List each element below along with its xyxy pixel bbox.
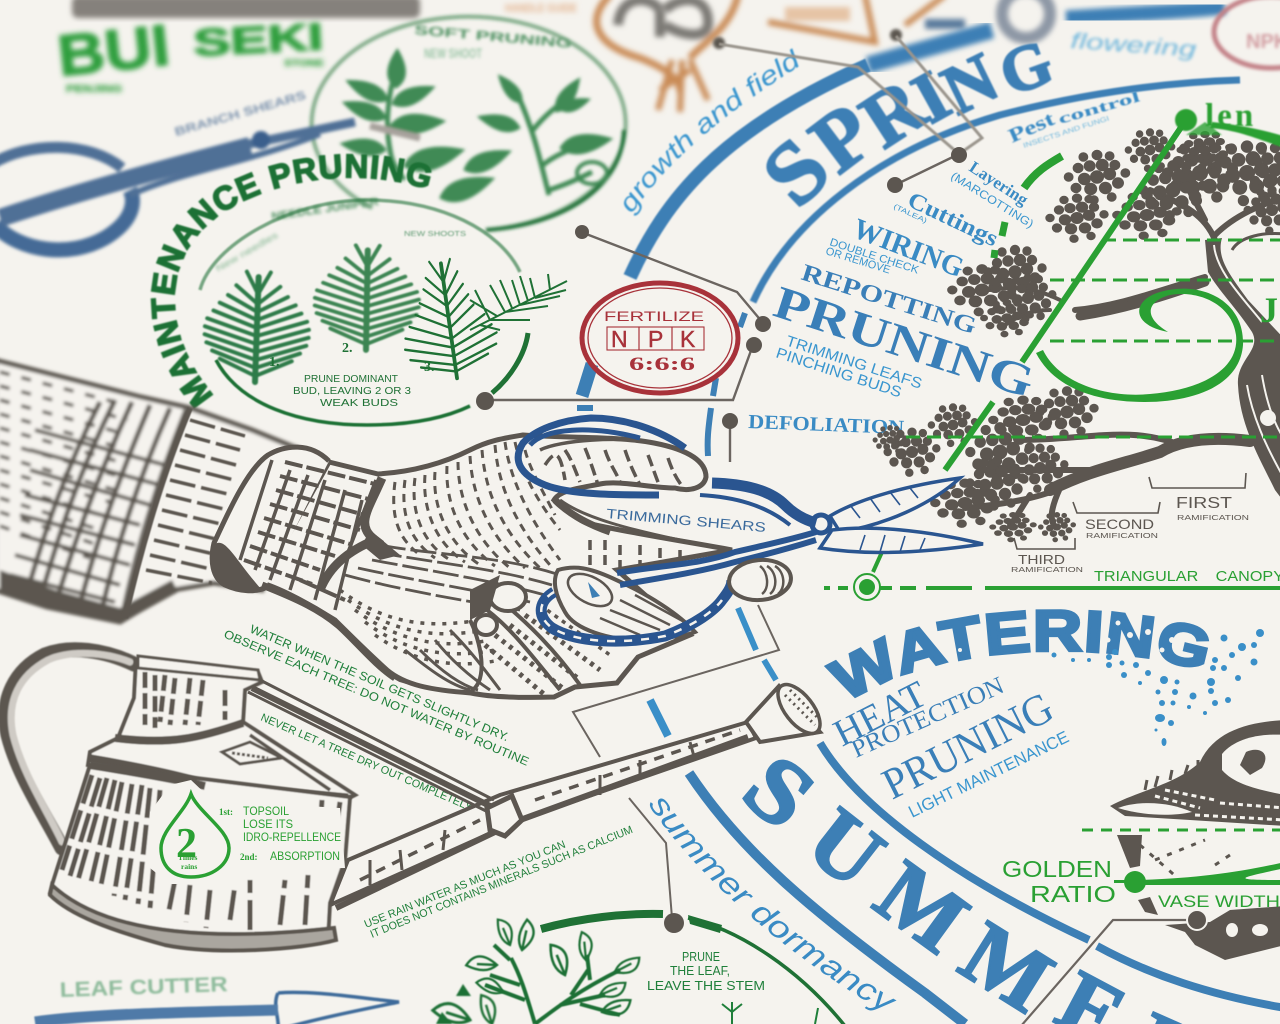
fern three with long branch <box>393 254 567 385</box>
handle bottom loop <box>617 532 816 573</box>
shears label: BRANCH SHEARS <box>173 88 308 139</box>
layering: Layering <box>966 157 1032 210</box>
can handle <box>6 650 134 848</box>
finger joints <box>475 583 526 635</box>
cuttings: Cuttings <box>904 187 1002 251</box>
first: FIRST <box>1176 495 1232 512</box>
dashed rim line <box>1082 828 1280 832</box>
outer arc below stamp <box>582 364 592 396</box>
heading: watering: WATERING <box>824 609 1210 698</box>
stamp: fertilize npk <box>582 283 738 393</box>
dashed height lines <box>906 240 1280 437</box>
pest control <box>1005 89 1142 150</box>
absorption notes: ABSORPTION <box>270 851 340 863</box>
pot dashes <box>1140 840 1230 880</box>
sleeve near part <box>125 408 245 618</box>
heading: spring: N <box>931 39 1010 130</box>
inner spring arc <box>753 80 1240 302</box>
golden ratio text: RATIO <box>1030 881 1116 907</box>
left plant leaves <box>433 984 495 1024</box>
pruning: PRUNING <box>768 276 1041 408</box>
blade lower <box>820 528 983 552</box>
short canopy arc <box>994 156 1062 258</box>
absorption notes: TOPSOIL <box>243 806 290 818</box>
can body <box>50 765 350 950</box>
circle heading: SOFT PRUNING <box>414 22 572 51</box>
third sub: RAMIFICATION <box>1011 565 1083 574</box>
foot holes <box>1226 923 1268 937</box>
defoliation: DEFOLIATION <box>748 411 905 439</box>
numerals: 1. <box>269 355 280 370</box>
can spout <box>248 678 828 908</box>
connector dots blurred top <box>713 29 902 49</box>
golden ratio dot <box>1114 871 1146 893</box>
subtitle under heading: NEEDLE JUNIPER <box>271 196 379 223</box>
pot left wall <box>1117 835 1142 868</box>
plant branches <box>485 945 620 1024</box>
left margin rule <box>62 20 68 1024</box>
plant leaves <box>466 918 641 1015</box>
knob <box>727 557 793 603</box>
panel: upper tree canopy <box>873 129 1280 542</box>
label: LEAF CUTTER <box>59 973 228 1002</box>
heading: spring: I <box>899 55 963 139</box>
first sub: RAMIFICATION <box>1177 513 1249 522</box>
heading: spring: R <box>845 60 941 164</box>
golden ratio text <box>1002 856 1116 907</box>
water drop badge <box>150 780 345 884</box>
absorption notes <box>219 806 341 863</box>
circle outline <box>312 17 626 230</box>
branches <box>965 165 1280 527</box>
tagline: flowering: flowering <box>1070 28 1198 62</box>
thumb <box>555 568 695 640</box>
pruning notes two: PINCHING BUDS <box>774 345 904 401</box>
panel: watering can <box>6 650 828 950</box>
golden ratio text: GOLDEN <box>1002 856 1112 882</box>
number: 2 <box>176 821 197 867</box>
leaf note: THE LEAF, <box>670 963 730 978</box>
stamp heading: FERTILIZE <box>604 308 704 324</box>
spout collar <box>487 796 522 836</box>
summer tasks <box>827 672 1072 822</box>
can label plate <box>222 742 282 764</box>
grey tool <box>618 0 708 37</box>
blue nail mark <box>588 582 600 598</box>
wiring note: DOUBLE CHECK <box>828 236 921 277</box>
title: bui seki: STONE <box>284 58 324 68</box>
spiral <box>1036 289 1243 402</box>
panel: branch shears blurred <box>0 88 355 250</box>
numerals: 2. <box>342 341 352 356</box>
tagline: summer dormancy: summer dormancy <box>650 798 896 1010</box>
heading: summer <box>725 734 1219 1024</box>
root ball highlight <box>1118 735 1280 815</box>
connector dot <box>664 913 684 933</box>
neck and shoulder <box>88 656 355 800</box>
panel: trunk <box>1205 234 1280 510</box>
vase connector <box>1021 920 1195 1024</box>
panel: golden spiral and triangle construction <box>824 98 1280 600</box>
sprig one <box>339 49 514 207</box>
right note: NEW SHOOTS <box>404 231 466 238</box>
heading len: len <box>1205 98 1256 134</box>
panel: vase and root <box>1002 720 1280 1024</box>
protection: PROTECTION <box>847 672 1008 763</box>
pruning note <box>293 374 411 409</box>
grey ring <box>1002 0 1050 38</box>
heading: spring: G <box>990 26 1061 109</box>
trunk mass <box>1205 238 1280 510</box>
rains: rains <box>181 862 197 871</box>
orange triangle tool <box>768 0 945 42</box>
circle arcs <box>200 200 528 425</box>
wiring note two: OR REMOVE <box>824 245 892 276</box>
heading: spring: S <box>743 119 848 225</box>
title: bui seki <box>55 13 324 95</box>
tagline: growth and field: growth and field <box>622 48 800 217</box>
continuing outer arc <box>650 700 668 736</box>
pruning note: BUD, LEAVING 2 OR 3 <box>293 386 411 397</box>
connector dots <box>476 147 967 429</box>
cuff ring <box>212 447 329 591</box>
npk boxes <box>607 327 704 350</box>
letter J: J <box>1260 290 1278 330</box>
heading: spring: P <box>794 86 891 191</box>
top grey tool bar <box>72 0 420 18</box>
thumb nail <box>563 567 690 635</box>
times rains: Times <box>178 853 198 862</box>
pest control: Pest <box>1005 108 1058 148</box>
numerals <box>269 341 434 375</box>
blade upper <box>830 478 960 532</box>
trunk strands <box>1214 245 1280 480</box>
panel: soft pruning circle <box>312 17 626 230</box>
heading: summer: U <box>790 789 902 907</box>
arc thick <box>541 914 663 929</box>
panel: leaf pruning circle <box>433 913 845 1024</box>
triangle side line <box>873 120 1186 572</box>
pruning: PRUNING <box>874 682 1061 809</box>
pruning note: PRUNE DOMINANT <box>304 374 398 385</box>
orange tool <box>597 0 738 92</box>
arc right <box>688 918 845 1024</box>
pest control: control <box>1057 89 1142 128</box>
fern one <box>203 270 311 384</box>
small note: NEW SHOOT <box>424 45 482 61</box>
small notes: New needles <box>214 230 280 274</box>
heading: summer: M <box>858 842 985 972</box>
fern two <box>314 245 420 351</box>
absorption notes: IDRO-REPELLENCE <box>243 832 341 844</box>
golden ratio lines <box>1140 862 1280 885</box>
note four: USE RAIN WATER AS MUCH AS YOU CAN <box>363 839 567 931</box>
knit wrist <box>240 460 395 678</box>
talea: (TALEA) <box>892 203 928 225</box>
panel: maintenance pruning circle <box>150 152 568 428</box>
upper finger lines <box>540 439 732 570</box>
foliage <box>1064 150 1130 204</box>
outer summer arc <box>689 773 965 1024</box>
blade hatch <box>850 488 925 552</box>
rose head <box>746 686 820 742</box>
npk letters: N <box>611 326 628 352</box>
npk letters: P <box>648 326 663 352</box>
panel: sleeve <box>0 360 296 624</box>
inner summer arc <box>820 743 1089 940</box>
heading: spring <box>743 26 1061 225</box>
stamp: top right red blurred <box>1214 0 1280 68</box>
shadow joining finger and palm <box>362 530 500 620</box>
panel: spring arcs <box>577 7 1240 456</box>
connector dot <box>1187 910 1207 930</box>
title: bui seki: SEKI <box>192 16 324 65</box>
spring tasks <box>748 89 1142 439</box>
white stitching <box>541 592 722 641</box>
pivot <box>812 515 830 533</box>
numerals: 3. <box>424 360 434 375</box>
absorption notes: 2nd: <box>240 852 258 862</box>
npk letters: K <box>680 326 696 352</box>
white window in trunk <box>1232 235 1280 300</box>
panel: summer arcs <box>689 743 1280 1024</box>
continuing blue arc segments <box>738 608 776 680</box>
grey blade tip <box>370 126 420 138</box>
first ramification bracket <box>1014 473 1246 549</box>
small sprig <box>722 1002 818 1024</box>
outer spring arc <box>630 65 868 277</box>
note two: OBSERVE EACH TREE: DO NOT WATER BY ROUTINE <box>222 627 531 769</box>
note five: IT DOES NOT CONTAINS MINERALS SUCH AS CALCIUM <box>369 824 635 941</box>
leaf note <box>647 949 765 993</box>
connector lines spring <box>485 36 982 462</box>
sleeve far part <box>0 360 296 624</box>
ratio: 6:6:6 <box>629 354 695 375</box>
panel: trimming shears <box>518 418 983 736</box>
title: bui seki: BUI <box>55 13 173 89</box>
sprig two <box>476 71 614 195</box>
apex dot <box>1175 109 1280 150</box>
second: SECOND <box>1085 516 1154 532</box>
rim dots <box>1155 790 1280 820</box>
pest control: INSECTS AND FUNGI <box>1022 115 1110 150</box>
hand silhouette <box>262 435 732 697</box>
cutter outline <box>276 992 399 1024</box>
pruning notes: TRIMMING LEAFS <box>784 333 924 393</box>
note three: NEVER LET A TREE DRY OUT COMPLETELY! <box>259 712 476 815</box>
palm hatching <box>394 442 560 568</box>
top centre blurred tool illustration <box>505 0 1050 112</box>
panel: hand holding shears <box>212 435 732 697</box>
heat: HEAT <box>827 673 933 755</box>
brace bar <box>248 680 494 812</box>
triangular baseline <box>824 586 1280 590</box>
root ball <box>1110 720 1280 826</box>
curved heading: MAINTENANCE PRUNING <box>150 152 432 409</box>
absorption notes: LOSE ITS <box>243 819 293 831</box>
white drops on heading <box>958 620 1175 652</box>
ramification labels <box>1011 473 1249 574</box>
heading: summer: S <box>725 734 834 848</box>
wiring: WIRING <box>848 213 968 284</box>
third: THIRD <box>1018 552 1065 567</box>
marcotting: (MARCOTTING) <box>948 170 1035 231</box>
leaf note: LEAVE THE STEM <box>647 978 765 993</box>
leaf cutter tool <box>35 973 399 1024</box>
shears label: TRIMMING SHEARS <box>606 506 766 535</box>
watering notes <box>222 622 635 941</box>
cuff shadow <box>214 543 262 591</box>
note one: WATER WHEN THE SOIL GETS SLIGHTLY DRY. <box>248 622 511 744</box>
lower palm lines <box>340 545 580 692</box>
leaf note: PRUNE <box>682 949 720 964</box>
pruning note: WEAK BUDS <box>320 398 398 409</box>
base dot <box>854 574 880 600</box>
second sub: RAMIFICATION <box>1086 531 1158 540</box>
handle top loop <box>518 418 816 641</box>
canopy label: TRIANGULAR CANOPY <box>1094 568 1280 585</box>
orange label: HANDLE GUIDE <box>505 1 577 15</box>
water droplets <box>1052 629 1264 746</box>
root ball dark marks <box>1240 750 1265 775</box>
repotting: REPOTTING <box>798 260 980 340</box>
connector lines near can <box>573 605 779 918</box>
light maintenance: LIGHT MAINTENANCE <box>905 727 1072 822</box>
vase width: VASE WIDTH <box>1158 892 1280 911</box>
npk letters <box>611 326 696 352</box>
title: bui seki: PENJING <box>66 84 122 95</box>
finger dots <box>485 605 610 695</box>
absorption notes: 1st: <box>219 807 233 817</box>
pot foot <box>1138 897 1280 960</box>
